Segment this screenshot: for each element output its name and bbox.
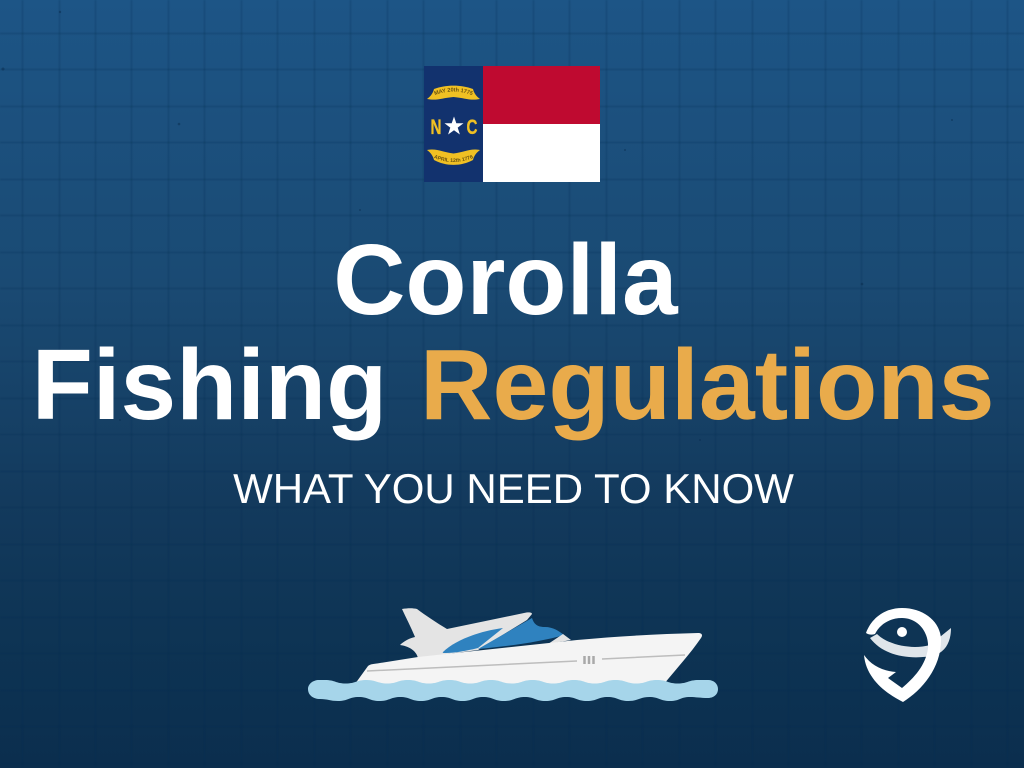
hull stripe bbox=[367, 655, 685, 671]
flybridge and fin bbox=[400, 608, 532, 658]
hull bbox=[355, 633, 702, 684]
illustration: motor yacht on waves bbox=[308, 608, 718, 701]
state initials and star bbox=[430, 116, 478, 139]
bottom ribbon: April 12th 1776: APRIL 12th 1776 bbox=[434, 155, 473, 162]
title bbox=[32, 224, 994, 441]
state initials and star: N bbox=[430, 116, 442, 139]
title line: Fishing: Fishing bbox=[32, 329, 387, 441]
water waves bbox=[308, 680, 718, 701]
logo outline bbox=[864, 608, 941, 702]
logo: fish hook emblem bbox=[864, 608, 951, 702]
fish tail band bbox=[870, 628, 951, 657]
fish eye bbox=[897, 627, 907, 637]
subtitle: WHAT YOU NEED TO KNOW bbox=[233, 465, 794, 512]
highlighted word: Regulations: Regulations bbox=[420, 329, 994, 441]
tinted windshield bbox=[478, 618, 564, 649]
top ribbon: May 20th 1775: MAY 20th 1775 bbox=[434, 88, 473, 95]
state initials and star: C bbox=[466, 116, 478, 139]
bottom ribbon: April 12th 1776 bbox=[427, 150, 480, 165]
tinted side window bbox=[443, 628, 503, 653]
top ribbon: May 20th 1775 bbox=[427, 86, 480, 100]
hull vents bbox=[584, 656, 594, 664]
flag: North Carolina bbox=[424, 66, 600, 182]
title line: Corolla: Corolla bbox=[333, 224, 679, 336]
